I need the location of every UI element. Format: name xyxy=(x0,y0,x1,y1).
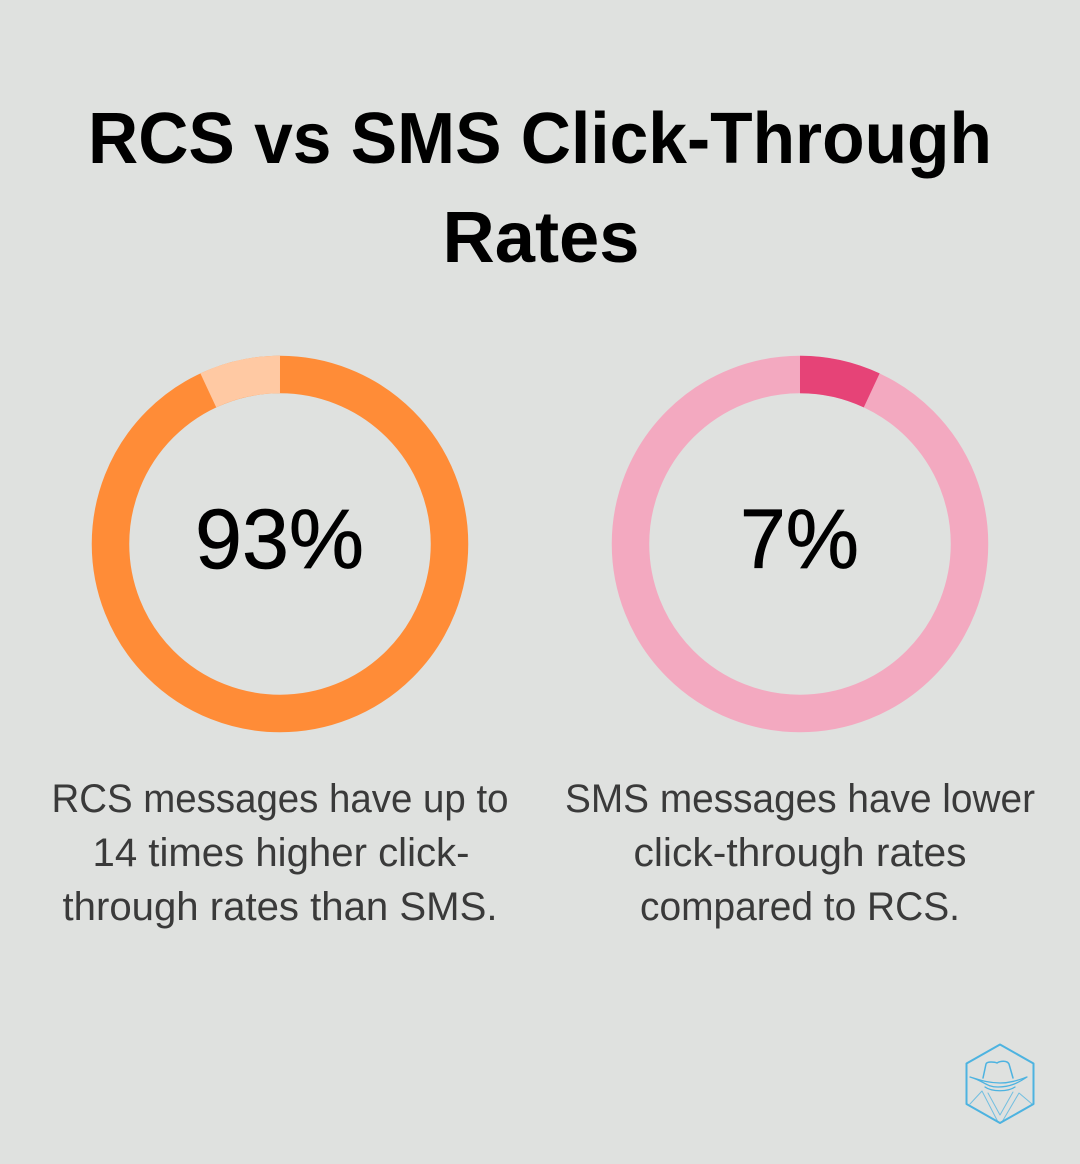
description: SMS: SMS messages have lower xyxy=(565,777,1035,821)
value: 7%: 7% xyxy=(740,492,859,586)
icon: spy logo xyxy=(966,1044,1034,1123)
panel: RCS xyxy=(52,374,508,929)
title xyxy=(88,99,992,278)
title: Rates xyxy=(442,198,640,278)
description: RCS: RCS messages have up to xyxy=(52,777,508,821)
donut chart: SMS 7% xyxy=(630,374,970,714)
description: SMS xyxy=(565,777,1035,929)
donut chart: RCS 93% xyxy=(110,374,450,714)
description: SMS: click-through rates xyxy=(634,831,966,875)
description: SMS: compared to RCS. xyxy=(640,885,960,929)
value: 93%: 93% xyxy=(195,492,364,586)
description: RCS: 14 times higher click- xyxy=(92,831,469,875)
panel: SMS xyxy=(565,374,1035,929)
description: RCS xyxy=(52,777,508,929)
title: RCS vs SMS Click-Through xyxy=(88,99,992,179)
description: RCS: through rates than SMS. xyxy=(62,885,498,929)
